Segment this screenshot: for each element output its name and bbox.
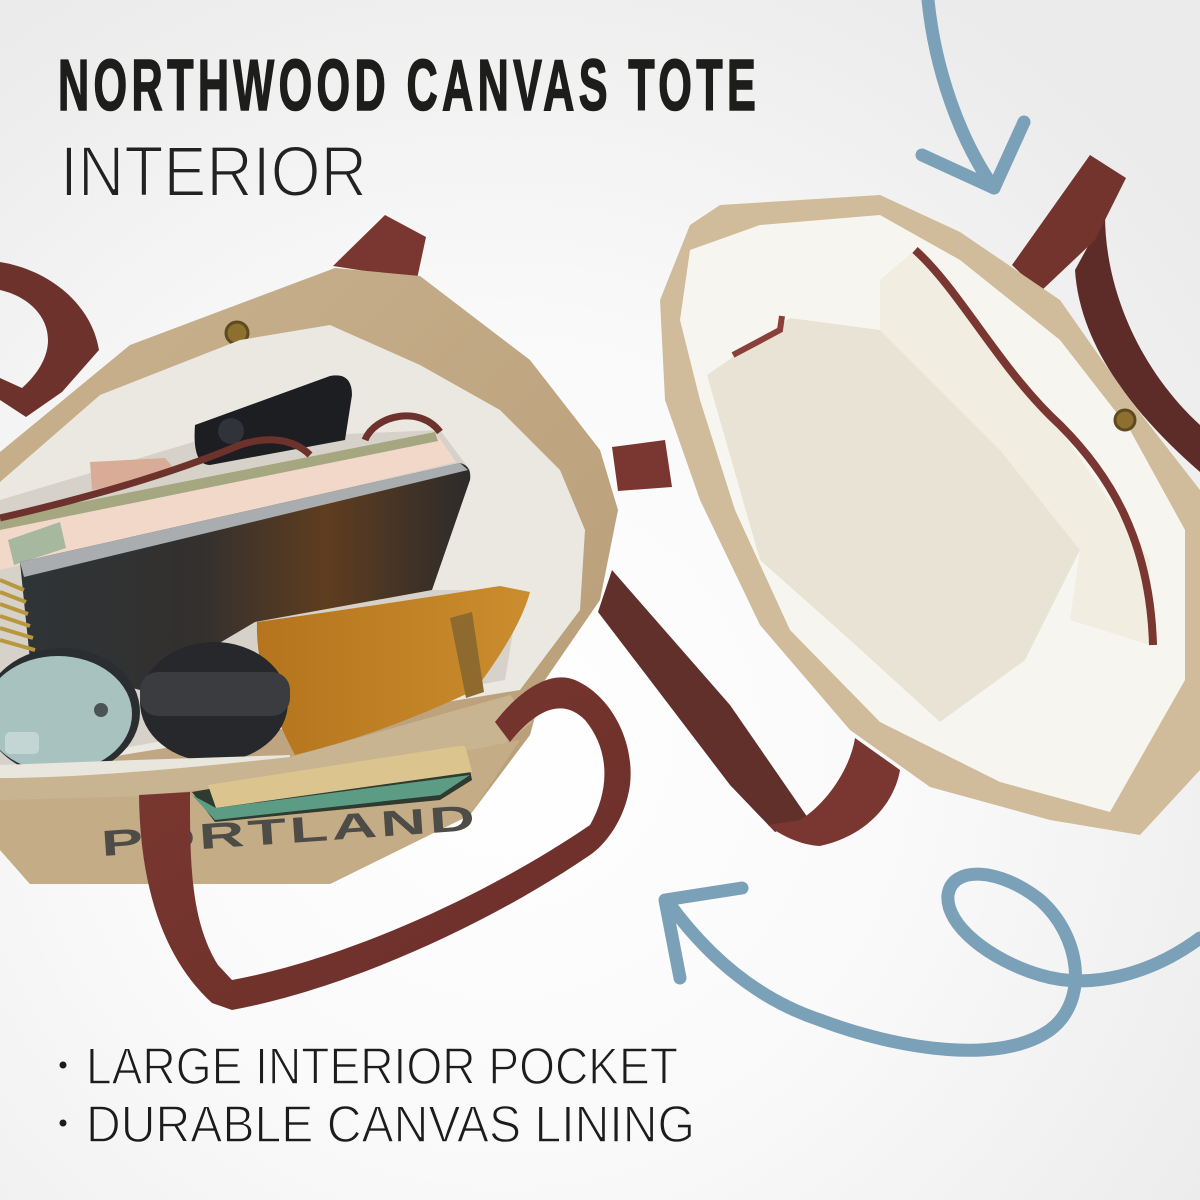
spiral binding [0, 580, 35, 650]
subtitle: INTERIOR [60, 133, 367, 212]
lining edge below cups [0, 755, 290, 782]
feature list [60, 1038, 695, 1154]
pink clip [90, 458, 172, 490]
pocket leather trim [915, 250, 1153, 645]
outer canvas [660, 195, 1200, 835]
bullet 2 [60, 1120, 66, 1126]
photo: open tote with contents [0, 215, 631, 1010]
leather pouch [257, 586, 530, 755]
title: NORTHWOOD CANVAS TOTE [58, 45, 756, 126]
brass snap [226, 322, 248, 344]
bullet 1 [60, 1062, 66, 1068]
brass snap [1115, 410, 1135, 430]
front pocket book [192, 745, 472, 822]
back handle loops [0, 215, 426, 417]
leather tab [733, 316, 782, 355]
front handle [139, 677, 631, 1010]
inner leather strap [0, 416, 440, 518]
arrow: top [922, 0, 1024, 188]
lining [680, 215, 1185, 812]
mint tumbler lid [0, 648, 140, 776]
feature: lining: DURABLE CANVAS LINING [86, 1096, 695, 1154]
black bottle cap [140, 642, 290, 762]
interior shadow [0, 430, 520, 770]
feature: pocket: LARGE INTERIOR POCKET [86, 1038, 678, 1096]
base panel [707, 318, 1080, 722]
phone [195, 375, 352, 465]
arrow: looping bottom [665, 874, 1200, 1050]
laptop [20, 463, 470, 690]
tote outer canvas [0, 268, 618, 884]
front canvas panel [0, 740, 520, 884]
right handle [1012, 155, 1200, 472]
interior pocket [880, 250, 1150, 645]
white lining [0, 325, 585, 775]
PORTLAND print: PORTLAND [100, 797, 480, 864]
front rim [0, 695, 532, 805]
photo: empty tote [660, 155, 1200, 835]
connecting handle between totes [598, 440, 900, 846]
notebook [0, 432, 456, 570]
